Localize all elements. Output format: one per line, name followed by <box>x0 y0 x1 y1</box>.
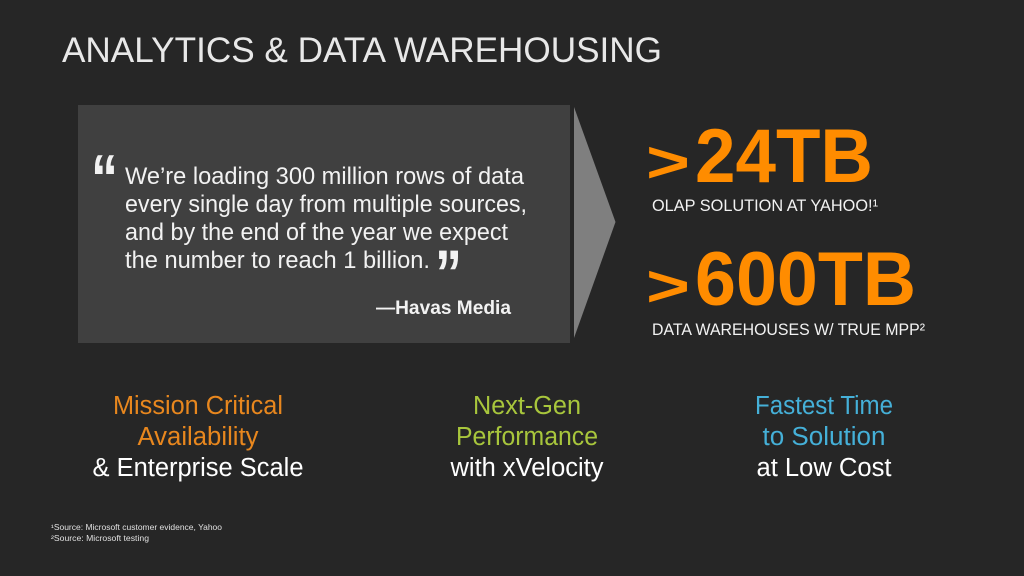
stat: 24TB: > <box>646 130 690 195</box>
pillar: mission critical: & Enterprise Scale <box>92 454 304 482</box>
footnotes <box>51 523 223 543</box>
pillar: mission critical <box>92 392 304 482</box>
pillar: mission critical: Mission Critical <box>113 392 283 420</box>
icon: closing quotation mark: ” <box>435 236 462 310</box>
quote text: We’re loading 300 million rows of data <box>125 163 524 190</box>
footnotes: ¹Source: Microsoft customer evidence, Yahoo <box>51 523 223 532</box>
quote text: and by the end of the year we expect <box>125 219 508 246</box>
icon: opening quotation mark: “ <box>91 141 118 215</box>
pillar: mission critical: Availability <box>138 423 259 451</box>
quote text: the number to reach 1 billion. <box>125 247 430 274</box>
pillar: fastest time: Fastest Time <box>755 392 893 420</box>
footnotes: ²Source: Microsoft testing <box>51 534 149 543</box>
pillar: next-gen performance: with xVelocity <box>450 454 604 482</box>
stat: 600TB <box>646 237 925 339</box>
pillar: next-gen performance: Performance <box>456 423 598 451</box>
pillar: next-gen performance: Next-Gen <box>473 392 581 420</box>
pillar: next-gen performance <box>450 392 604 482</box>
pillar: fastest time: to Solution <box>762 423 886 451</box>
quote text <box>125 163 527 274</box>
pillar: fastest time: at Low Cost <box>756 454 892 482</box>
stat: 24TB: 24TB <box>695 114 873 199</box>
quote attribution: —Havas Media <box>376 298 511 319</box>
stat: 600TB: > <box>646 254 690 319</box>
panel: customer quote <box>78 105 570 343</box>
quote text: every single day from multiple sources, <box>125 191 527 218</box>
stat: 600TB: 600TB <box>695 237 916 322</box>
arrow <box>574 107 616 338</box>
stat: 24TB: OLAP SOLUTION AT YAHOO!¹ <box>652 197 878 215</box>
title: ANALYTICS & DATA WAREHOUSING <box>62 31 662 70</box>
stat: 600TB: DATA WAREHOUSES W/ TRUE MPP² <box>652 321 925 339</box>
pillar: fastest time <box>755 392 893 482</box>
stat: 24TB <box>646 114 878 215</box>
